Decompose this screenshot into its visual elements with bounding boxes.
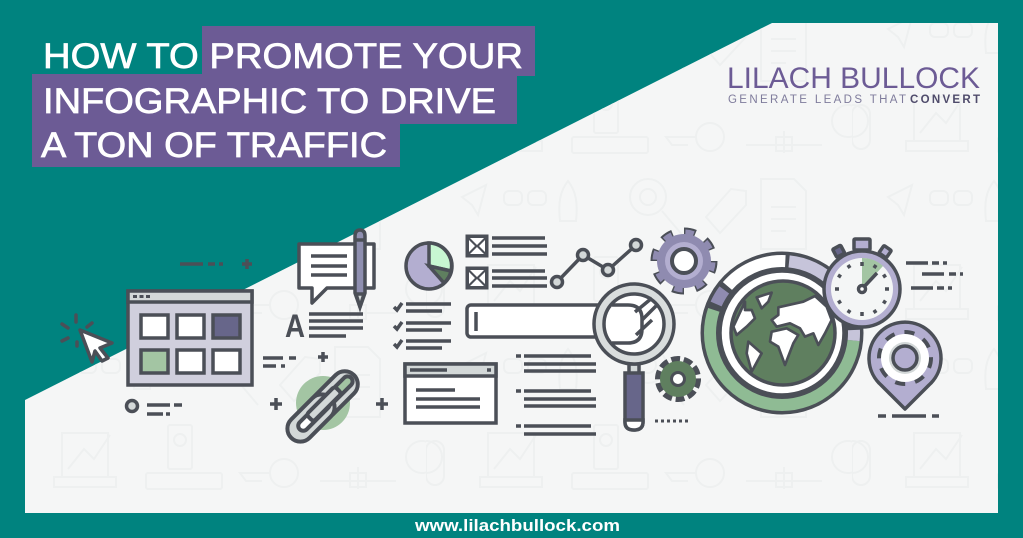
icon: checkbox list <box>466 235 547 289</box>
dashes and plus signs left <box>147 259 388 414</box>
icon: line graph <box>552 240 642 288</box>
icon: chain link on green circle <box>282 366 363 447</box>
icon: browser window with tiles <box>128 291 252 385</box>
icon: speech bubble with pencil <box>299 230 374 307</box>
icon: bullet circle <box>126 400 138 412</box>
title: INFOGRAPHIC TO DRIVE <box>43 82 496 121</box>
title: A TON OF TRAFFIC <box>41 126 387 165</box>
dashes below pin <box>878 414 939 418</box>
footer url: www.lilachbullock.com <box>414 516 620 535</box>
dotted line <box>655 420 690 422</box>
text list <box>516 356 596 434</box>
title: HOW TO PROMOTE YOUR <box>43 37 523 76</box>
icon: location pin with gear <box>869 322 941 409</box>
icon: magnifying glass <box>594 284 674 430</box>
speed dashes <box>906 263 963 288</box>
icon: search bar <box>467 305 607 337</box>
logo: LILACH BULLOCK <box>727 62 980 95</box>
icon: large purple gear <box>655 232 713 290</box>
logo: CONVERT <box>910 94 980 106</box>
logo: GENERATE LEADS THAT <box>728 94 906 106</box>
icon: stopwatch <box>824 239 900 327</box>
icon: pie chart <box>406 243 452 289</box>
icon: mouse cursor <box>62 315 112 362</box>
icon: text block with letter A: A <box>285 308 305 344</box>
icon: text block with letter A <box>285 308 363 344</box>
title <box>32 26 535 167</box>
icon: checklist <box>394 303 451 348</box>
icon: small green gear <box>659 360 697 398</box>
icon: globe with ring <box>710 261 854 405</box>
icon: small browser window <box>405 364 496 423</box>
